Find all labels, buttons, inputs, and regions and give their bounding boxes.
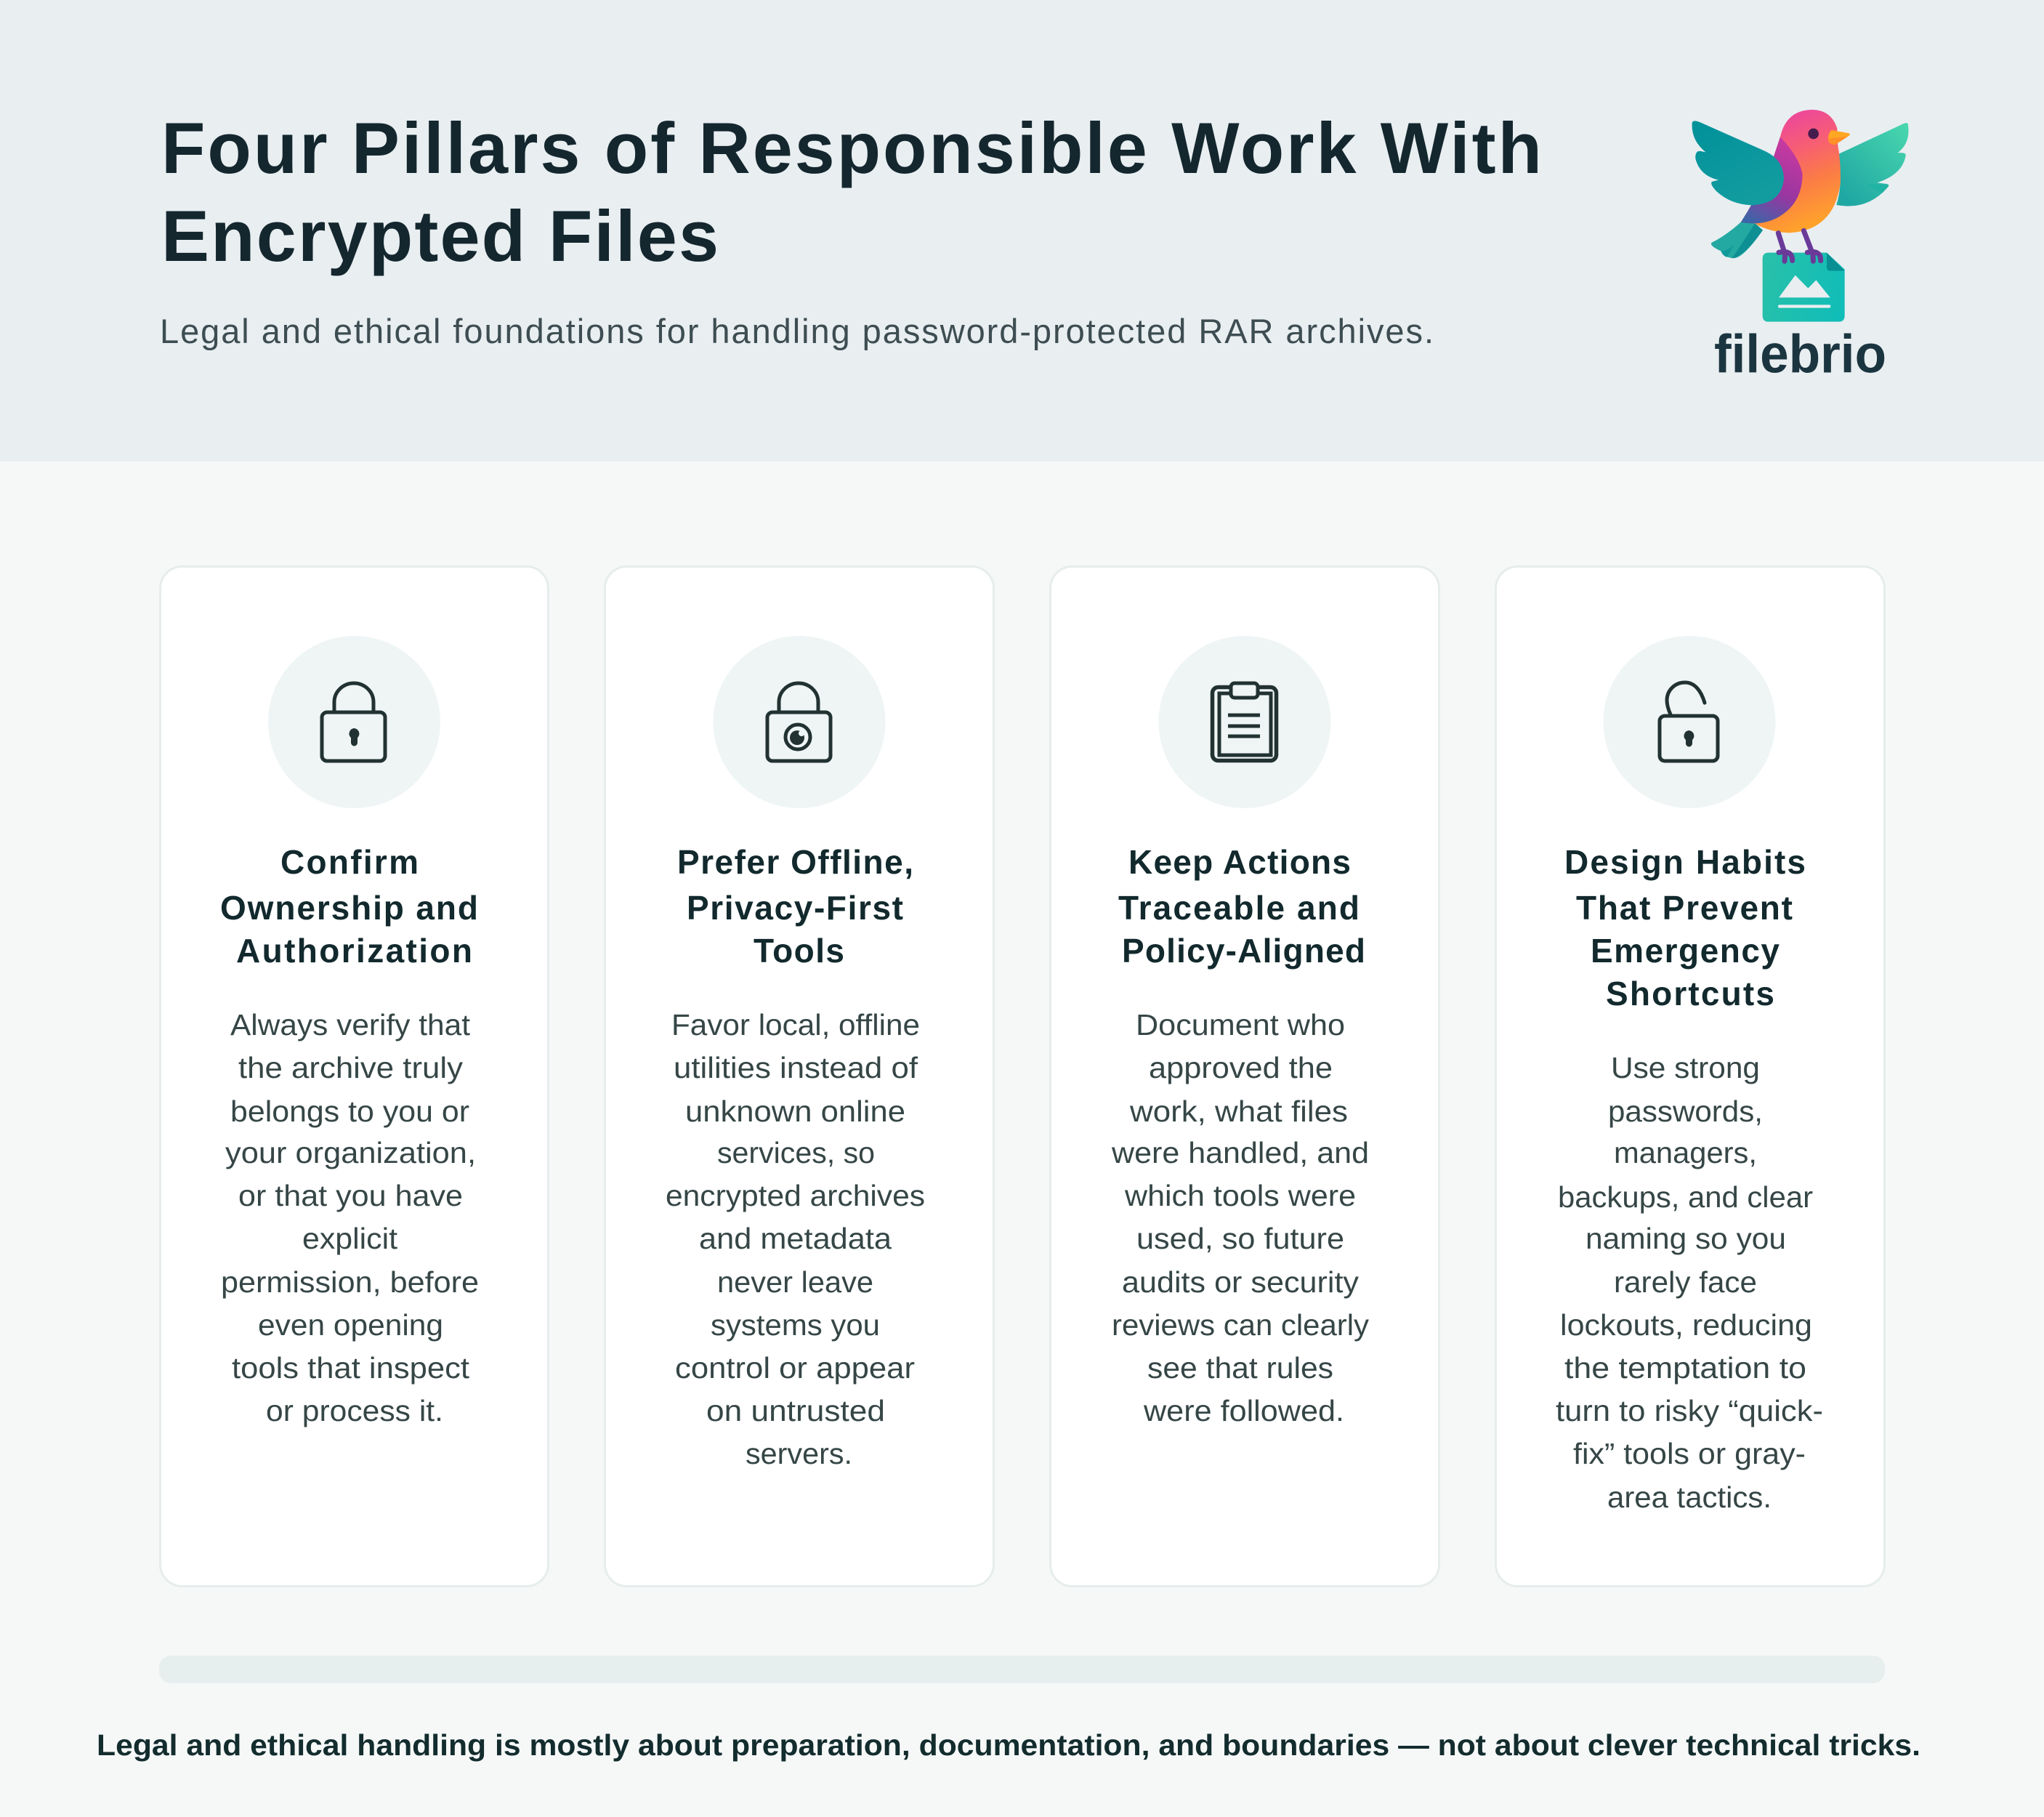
- icon: left wing: [1692, 121, 1784, 205]
- panel: design habits: [1495, 567, 1885, 1586]
- icon circle: [1158, 636, 1331, 808]
- heading: Keep Actions: [1128, 843, 1351, 881]
- heading: Confirm: [280, 843, 419, 881]
- heading: [220, 843, 478, 970]
- body text: control or appear: [675, 1351, 915, 1385]
- body text: servers.: [746, 1437, 852, 1470]
- body text: Use strong: [1611, 1051, 1760, 1084]
- body text: unknown online: [685, 1095, 905, 1128]
- panel: traceable actions: [1051, 567, 1439, 1586]
- body text: naming so you: [1585, 1222, 1786, 1255]
- body text: see that rules: [1147, 1351, 1333, 1385]
- icon: bird eye: [1808, 129, 1819, 139]
- heading: Design Habits: [1564, 843, 1806, 881]
- heading: Privacy-First: [687, 889, 903, 927]
- icon: legs: [1778, 230, 1821, 261]
- heading: Tools: [754, 932, 844, 970]
- body text: explicit: [302, 1222, 398, 1255]
- heading: That Prevent: [1576, 889, 1793, 927]
- title: Four Pillars of Responsible Work With: [161, 108, 1542, 188]
- body text: encrypted archives: [666, 1179, 925, 1212]
- body text: used, so future: [1136, 1222, 1344, 1255]
- body text: [1111, 1008, 1370, 1427]
- heading: [1564, 843, 1806, 1012]
- heading: Policy-Aligned: [1122, 932, 1365, 970]
- body text: were followed.: [1143, 1394, 1344, 1427]
- icon: purple crescent: [1741, 137, 1803, 223]
- panel: confirm ownership: [160, 567, 548, 1586]
- icon: padlock with eye: [767, 683, 831, 761]
- body text: fix” tools or gray-: [1573, 1437, 1806, 1470]
- body text: your organization,: [225, 1136, 476, 1169]
- heading: Shortcuts: [1606, 975, 1774, 1012]
- card background: [605, 567, 994, 1586]
- panel: offline tools: [605, 567, 994, 1586]
- heading: Emergency: [1591, 932, 1780, 970]
- body text: which tools were: [1124, 1179, 1356, 1212]
- body text: Favor local, offline: [671, 1008, 920, 1042]
- heading: [677, 843, 913, 970]
- body text: area tactics.: [1607, 1480, 1772, 1514]
- card background: [1495, 567, 1885, 1586]
- body text: work, what files: [1129, 1095, 1348, 1128]
- footer statement: Legal and ethical handling is mostly about preparation, documentation, and boundaries — not about clever technical tricks.: [97, 1728, 1920, 1762]
- logo: filebrio bird on file: [1692, 110, 1908, 384]
- body text: the temptation to: [1564, 1351, 1806, 1385]
- card background: [1051, 567, 1439, 1586]
- body text: turn to risky “quick-: [1556, 1394, 1823, 1427]
- icon circle: [268, 636, 440, 808]
- body text: managers,: [1614, 1136, 1757, 1169]
- card background: [160, 567, 548, 1586]
- divider bar: [159, 1656, 1885, 1683]
- icon circle: [1603, 636, 1776, 808]
- header band: [0, 0, 2044, 462]
- body text: Always verify that: [230, 1008, 471, 1042]
- body text: systems you: [711, 1308, 880, 1342]
- icon: clipboard: [1212, 683, 1276, 760]
- body text: approved the: [1149, 1051, 1333, 1084]
- body text: permission, before: [221, 1265, 479, 1299]
- subtitle: Legal and ethical foundations for handling password-protected RAR archives.: [160, 312, 1434, 350]
- icon circle: [714, 636, 885, 808]
- icon: right wing: [1836, 123, 1909, 206]
- heading: [1118, 843, 1365, 970]
- body text: the archive truly: [238, 1051, 464, 1084]
- body text: [1556, 1051, 1823, 1514]
- heading: Prefer Offline,: [677, 843, 913, 881]
- body text: [666, 1008, 925, 1470]
- body text: audits or security: [1122, 1265, 1360, 1299]
- body text: utilities instead of: [674, 1051, 918, 1084]
- body text: lockouts, reducing: [1560, 1308, 1812, 1342]
- body text: Document who: [1136, 1008, 1345, 1042]
- heading: Ownership and: [220, 889, 478, 927]
- icon: bird tail: [1711, 220, 1763, 259]
- icon: bird body: [1741, 110, 1841, 233]
- icon: padlock: [322, 683, 385, 761]
- wordmark: filebrio: [1714, 324, 1886, 384]
- heading: Authorization: [236, 932, 472, 970]
- body text: were handled, and: [1111, 1136, 1369, 1169]
- body text: tools that inspect: [232, 1351, 470, 1385]
- body text: on untrusted: [706, 1394, 885, 1427]
- icon: beak: [1828, 130, 1850, 145]
- body text: backups, and clear: [1558, 1180, 1813, 1214]
- body text: rarely face: [1614, 1265, 1757, 1299]
- icon: open padlock: [1660, 682, 1718, 761]
- body text: belongs to you or: [230, 1095, 469, 1128]
- body text: or that you have: [238, 1179, 463, 1212]
- title: Encrypted Files: [161, 196, 719, 276]
- heading: Traceable and: [1118, 889, 1360, 927]
- title: [161, 108, 1542, 276]
- body text: services, so: [717, 1136, 875, 1169]
- body text: passwords,: [1608, 1095, 1763, 1128]
- icon: file: [1763, 253, 1845, 322]
- body text: reviews can clearly: [1112, 1308, 1370, 1342]
- body text: even opening: [258, 1308, 443, 1342]
- body text: and metadata: [699, 1222, 892, 1255]
- body text: [221, 1008, 479, 1427]
- body text: or process it.: [266, 1394, 443, 1427]
- body text: never leave: [717, 1265, 873, 1299]
